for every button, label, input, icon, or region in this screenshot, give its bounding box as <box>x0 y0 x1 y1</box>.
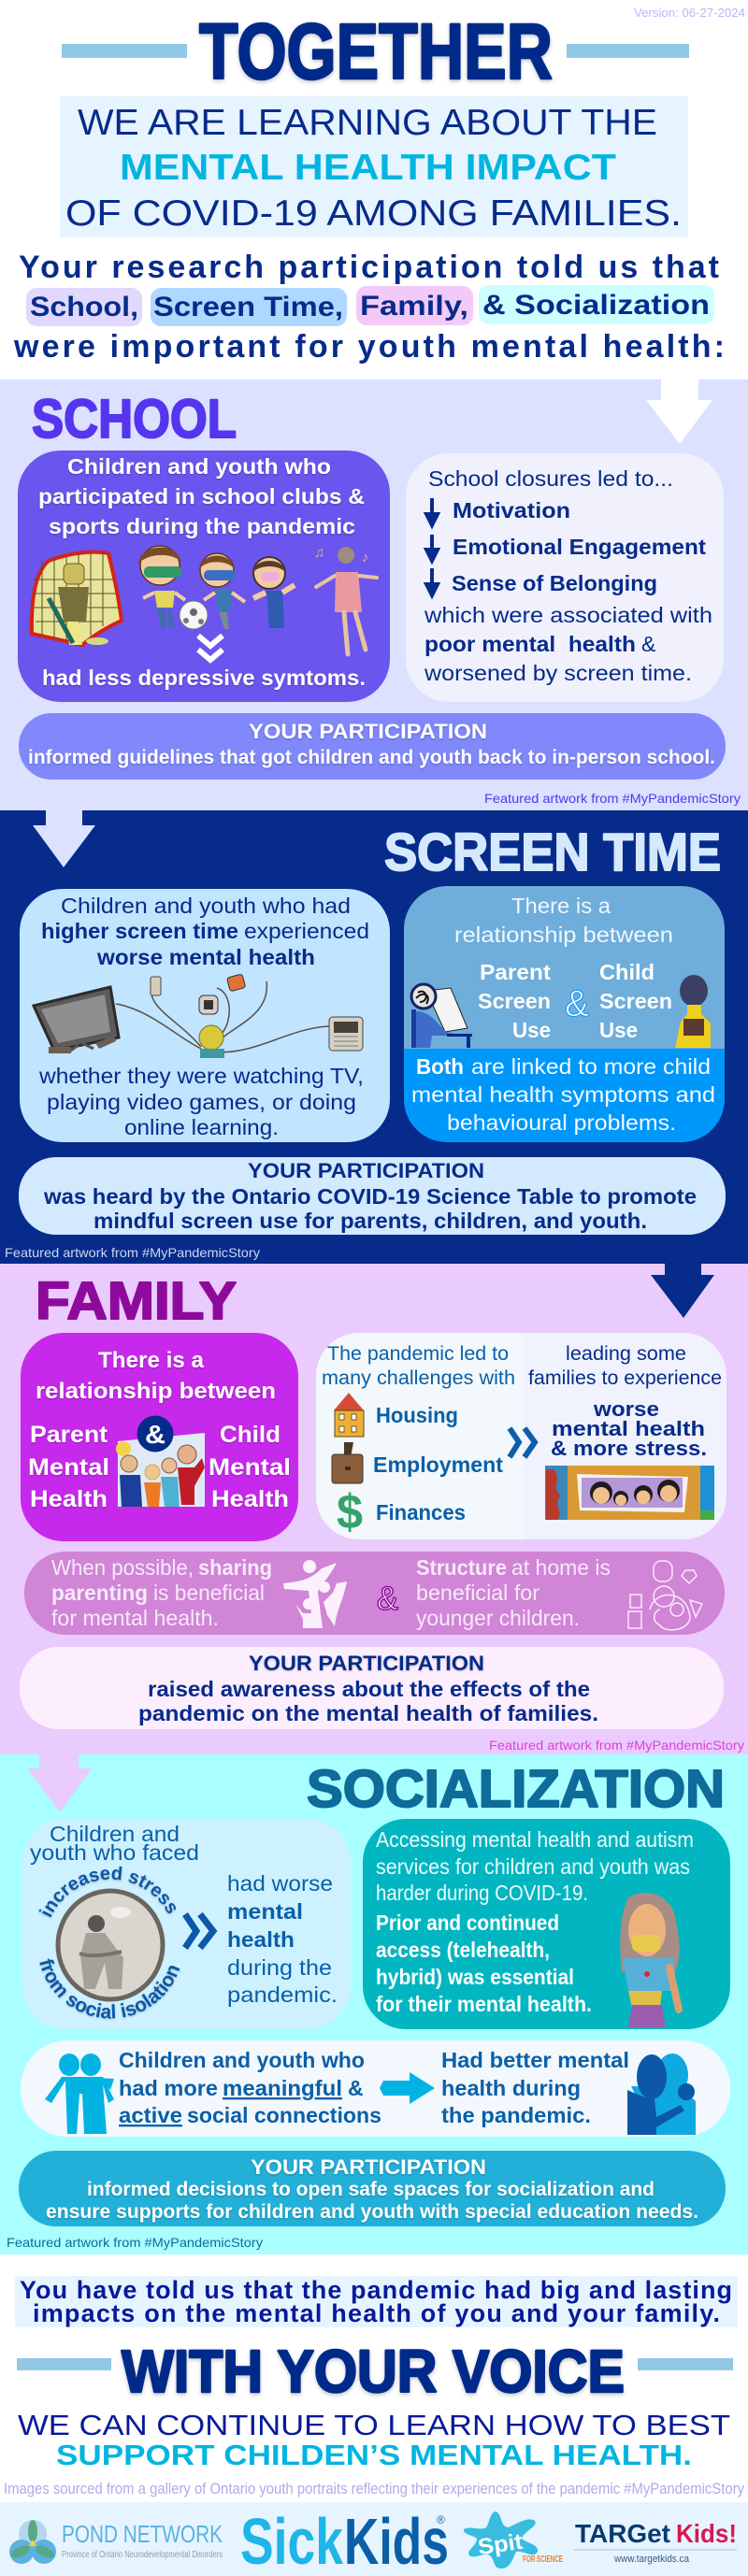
icon: three children in masks with soccer ball <box>138 546 295 629</box>
icon: ampersand badge: & <box>145 1420 165 1449</box>
card: meaningful social connections: social connections <box>187 2103 381 2127</box>
card: sharing parenting and structure: parenting <box>51 1581 148 1605</box>
card: higher screen time: experienced <box>244 919 369 943</box>
icon: girl in mask artwork <box>620 1893 679 2027</box>
card: access to services: access (telehealth, <box>376 1938 550 1962</box>
logo: pond network: POND NETWORK <box>62 2520 223 2548</box>
card: parent and child screen use: behavioural problems. <box>447 1110 676 1135</box>
logo: target kids: Kids! <box>676 2519 737 2548</box>
text: from social isolation arc: from social isolation <box>39 1959 180 2021</box>
card: social isolation: mental <box>227 1899 303 1924</box>
card: school closures: which were associated with <box>424 603 712 627</box>
card: social isolation <box>22 1819 351 2029</box>
card: social isolation: pandemic. <box>227 1982 338 2007</box>
card: clubs and sports: sports during the pandemic <box>49 514 355 538</box>
icon: house <box>334 1393 364 1437</box>
icon: hockey goalie artwork <box>32 551 122 645</box>
research participation statement: & Socialization <box>482 290 710 321</box>
card: social isolation: had worse <box>227 1871 333 1896</box>
research participation statement <box>13 250 725 365</box>
closing message <box>18 2409 730 2471</box>
card: clubs and sports: Children and youth who <box>67 454 331 479</box>
icon: shared parenting family <box>283 1560 347 1628</box>
logo: pond network <box>9 2520 223 2564</box>
card: parent and child mental health: Mental <box>28 1454 109 1481</box>
card: clubs and sports: participated in school clubs & <box>38 484 365 508</box>
card: access to services: hybrid) was essential <box>376 1965 574 1989</box>
card: parent and child mental health: relationship between <box>36 1379 276 1404</box>
research participation statement: School, <box>30 292 138 322</box>
card: meaningful social connections: & <box>348 2076 364 2100</box>
icon: sad family artwork <box>545 1466 714 1520</box>
card: parent and child mental health: Parent <box>30 1422 108 1448</box>
heading: screen time: SCREEN TIME <box>384 823 721 882</box>
callout: your participation screen time: was heard by the Ontario COVID-19 Science Table to promote <box>43 1184 697 1209</box>
card: parent and child mental health: Health <box>30 1486 108 1512</box>
card: school closures: & <box>641 632 655 656</box>
icon: ampersand badge <box>137 1415 174 1453</box>
intro banner: WE ARE LEARNING ABOUT THE <box>78 103 657 143</box>
callout: your participation socialization: informed decisions to open safe spaces for socialization and <box>87 2179 654 2200</box>
callout: your participation family: raised awareness about the effects of the <box>148 1677 590 1701</box>
card: higher screen time: whether they were watching TV, <box>38 1064 364 1088</box>
closing message: SUPPORT CHILDEN’S MENTAL HEALTH. <box>56 2439 692 2471</box>
panel: family <box>0 1264 748 1754</box>
icon: family portrait <box>116 1433 205 1507</box>
card: pandemic challenges: Employment <box>373 1453 503 1477</box>
icon: double chevron right <box>185 1914 213 1948</box>
icon: screens wired to child <box>34 974 363 1058</box>
icon: two people hugging <box>627 2054 696 2135</box>
card: meaningful social connections: active <box>119 2103 182 2127</box>
callout: your participation socialization: YOUR PARTICIPATION <box>251 2155 486 2179</box>
card: meaningful social connections: Children and youth who <box>119 2048 365 2072</box>
card: clubs and sports <box>18 451 390 702</box>
card: access to services: harder during COVID-19. <box>376 1881 588 1905</box>
card: pandemic challenges: worse <box>593 1397 659 1421</box>
card: pandemic challenges: The pandemic led to <box>327 1343 509 1365</box>
card: social isolation: youth who faced <box>30 1840 199 1865</box>
icon: double chevron right <box>510 1428 535 1457</box>
card: parent and child screen use: Use <box>512 1018 551 1042</box>
arrow: pale down arrow <box>33 810 95 867</box>
card: pandemic challenges: leading some <box>566 1343 686 1365</box>
arrow: lilac down arrow <box>27 1754 92 1812</box>
arrow: navy down arrow <box>651 1264 714 1318</box>
card: access to services: Prior and continued <box>376 1911 559 1935</box>
card: parent and child screen use: mental health symptoms and <box>411 1082 715 1107</box>
title: with your voice: WITH YOUR VOICE <box>122 2338 625 2405</box>
logo: spit for science <box>464 2512 563 2569</box>
callout: your participation socialization <box>19 2151 726 2226</box>
card: school closures <box>406 453 724 702</box>
heading: socialization: SOCIALIZATION <box>307 1759 725 1819</box>
research participation statement: Family, <box>360 291 468 322</box>
card: higher screen time: playing video games, or doing <box>47 1090 356 1114</box>
card: parent and child screen use: relationship between <box>454 923 673 947</box>
card: social isolation: during the <box>227 1955 332 1980</box>
logo: sickkids: Sick <box>240 2505 343 2576</box>
intro banner <box>60 96 688 237</box>
callout: your participation socialization: ensure supports for children and youth with special education needs. <box>46 2201 698 2223</box>
card: parent and child mental health: There is a <box>98 1348 205 1373</box>
card: pandemic challenges <box>316 1333 726 1539</box>
panel: school <box>0 379 748 810</box>
card: higher screen time: Children and youth who had <box>61 894 351 918</box>
card: parent and child screen use: Both <box>416 1054 464 1079</box>
card: parent and child screen use: Child <box>599 960 654 984</box>
card: social isolation: health <box>227 1927 295 1952</box>
panel: socialization <box>0 1754 748 2254</box>
card: meaningful social connections: the pandemic. <box>441 2103 591 2127</box>
card: school closures: Sense of Belonging <box>452 571 657 595</box>
card: school closures: School closures led to... <box>428 466 673 491</box>
intro banner: MENTAL HEALTH IMPACT <box>120 148 616 188</box>
research participation statement: Your research participation told us that <box>19 250 719 285</box>
card: pandemic challenges: & more stress. <box>551 1437 707 1460</box>
card: sharing parenting and structure: beneficial for <box>416 1581 539 1605</box>
card: school closures: worsened by screen time. <box>424 661 692 685</box>
logo: sickkids <box>240 2505 449 2576</box>
closing statement <box>15 2276 738 2327</box>
callout: your participation family: pandemic on the mental health of families. <box>138 1701 598 1725</box>
arrow: right <box>380 2072 435 2104</box>
card: sharing parenting and structure: younger children. <box>416 1606 580 1630</box>
card: sharing parenting and structure: sharing <box>198 1555 272 1580</box>
icon: dollar sign: $ <box>337 1485 363 1539</box>
card: pandemic challenges: mental health <box>552 1417 705 1440</box>
card: higher screen time: worse mental health <box>96 945 315 969</box>
icon: double chevron down <box>198 636 223 660</box>
card: access to services: Accessing mental health and autism <box>376 1827 694 1852</box>
icon: dancer with music notes <box>314 545 377 654</box>
heading: family: FAMILY <box>36 1271 237 1331</box>
callout: your participation screen time: YOUR PARTICIPATION <box>248 1159 484 1182</box>
card: parent and child screen use: Screen <box>599 989 672 1013</box>
card: parent and child mental health <box>21 1333 298 1541</box>
credit: family: Featured artwork from #MyPandemicStory <box>489 1738 744 1753</box>
card: parent and child screen use: Use <box>599 1018 638 1042</box>
icon: dancer with music notes: ♫ <box>314 545 324 561</box>
card: parent and child screen use: Parent <box>480 960 551 984</box>
icon: parent at screen <box>411 984 472 1048</box>
logo: sickkids: Kids <box>344 2505 449 2576</box>
logo: target kids: TARGet <box>575 2519 670 2548</box>
icon: two friends <box>45 2054 114 2134</box>
logo: spit for science: Spit <box>476 2529 525 2560</box>
research participation statement: were important for youth mental health: <box>13 329 725 365</box>
card: sharing parenting and structure: at home is <box>511 1555 611 1580</box>
card: access to services: services for children and youth was <box>376 1854 690 1879</box>
credit: socialization: Featured artwork from #MyPandemicStory <box>7 2235 263 2250</box>
card: meaningful social connections: Had better mental <box>441 2048 629 2072</box>
icon: structure at home outline <box>628 1561 702 1630</box>
logo: sickkids: ® <box>437 2513 445 2526</box>
panel: screen time <box>0 810 748 1264</box>
card: higher screen time <box>20 889 390 1142</box>
logo: pond network: Province of Ontario Neurodevelopmental Disorders <box>62 2550 223 2560</box>
card: parent and child screen use <box>404 886 725 1142</box>
icon: isolated youth portrait <box>58 1891 163 1999</box>
closing message: WE CAN CONTINUE TO LEARN HOW TO BEST <box>18 2409 730 2441</box>
callout: your participation school <box>19 713 726 780</box>
closing statement: You have told us that the pandemic had big and lasting <box>20 2276 732 2304</box>
card: higher screen time: online learning. <box>124 1115 279 1139</box>
card: sharing parenting and structure: & <box>377 1581 398 1617</box>
logo: target kids <box>574 2519 737 2565</box>
card: pandemic challenges: Housing <box>376 1403 458 1427</box>
card: school closures: Motivation <box>453 498 570 522</box>
heading: school: SCHOOL <box>32 389 237 450</box>
card: parent and child screen use: & <box>565 983 589 1024</box>
card: sharing parenting and structure: Structure <box>416 1555 507 1580</box>
logo: spit for science: FOR SCIENCE <box>523 2555 563 2565</box>
card: clubs and sports: had less depressive symtoms. <box>42 665 366 690</box>
text: increased stress arc: increased stress <box>38 1866 177 1919</box>
card: meaningful social connections: had more <box>119 2076 218 2100</box>
card: school closures: Emotional Engagement <box>453 535 706 559</box>
card: sharing parenting and structure: for mental health. <box>51 1606 219 1630</box>
logo: target kids: www.targetkids.ca <box>613 2554 690 2565</box>
research participation statement: Screen Time, <box>153 292 343 322</box>
card: pandemic challenges: families to experience <box>528 1367 722 1389</box>
icon: dancer with music notes: ♪ <box>362 550 368 565</box>
card: sharing parenting and structure: is beneficial <box>153 1581 265 1605</box>
card: meaningful social connections <box>21 2040 730 2137</box>
callout: your participation school: informed guidelines that got children and youth back to in-person school. <box>28 747 715 768</box>
callout: your participation family <box>20 1647 724 1729</box>
card: social isolation: Children and <box>50 1822 180 1846</box>
closing statement: impacts on the mental health of you and your family. <box>33 2299 720 2327</box>
callout: your participation screen time: mindful screen use for parents, children, and youth. <box>94 1209 647 1233</box>
card: parent and child mental health: Child <box>220 1422 280 1448</box>
card: parent and child mental health: Mental <box>209 1454 291 1481</box>
card: access to services: for their mental health. <box>376 1992 592 2016</box>
card: school closures: poor mental health <box>424 632 636 656</box>
card: meaningful social connections: health during <box>441 2076 581 2100</box>
title: together: TOGETHER <box>199 7 553 95</box>
title: together <box>62 7 689 95</box>
card: parent and child screen use: Screen <box>478 989 551 1013</box>
card: parent and child mental health: Health <box>211 1486 289 1512</box>
card: pandemic challenges: Finances <box>376 1500 466 1524</box>
card: meaningful social connections: meaningful <box>223 2076 342 2100</box>
card: sharing parenting and structure <box>24 1552 725 1635</box>
card: access to services <box>363 1819 730 2029</box>
logo band <box>0 2502 748 2576</box>
callout: your participation school: YOUR PARTICIPATION <box>249 720 487 743</box>
credit: school: Featured artwork from #MyPandemicStory <box>484 791 741 806</box>
icon: briefcase <box>332 1442 363 1483</box>
callout: your participation family: YOUR PARTICIPATION <box>249 1652 484 1675</box>
card: higher screen time: higher screen time <box>41 919 238 943</box>
version label: Version: 06-27-2024 <box>634 6 745 20</box>
card: sharing parenting and structure: When possible, <box>51 1555 194 1580</box>
intro banner: OF COVID-19 AMONG FAMILIES. <box>65 193 682 234</box>
arrow: white down arrow <box>646 379 712 444</box>
callout: your participation screen time <box>19 1157 726 1235</box>
card: pandemic challenges: many challenges with <box>322 1367 515 1389</box>
credit: screen time: Featured artwork from #MyPandemicStory <box>5 1245 260 1260</box>
card: parent and child screen use: are linked to more child <box>471 1054 711 1079</box>
icon: child on tablet <box>675 975 711 1048</box>
card: parent and child screen use: There is a <box>511 894 611 918</box>
